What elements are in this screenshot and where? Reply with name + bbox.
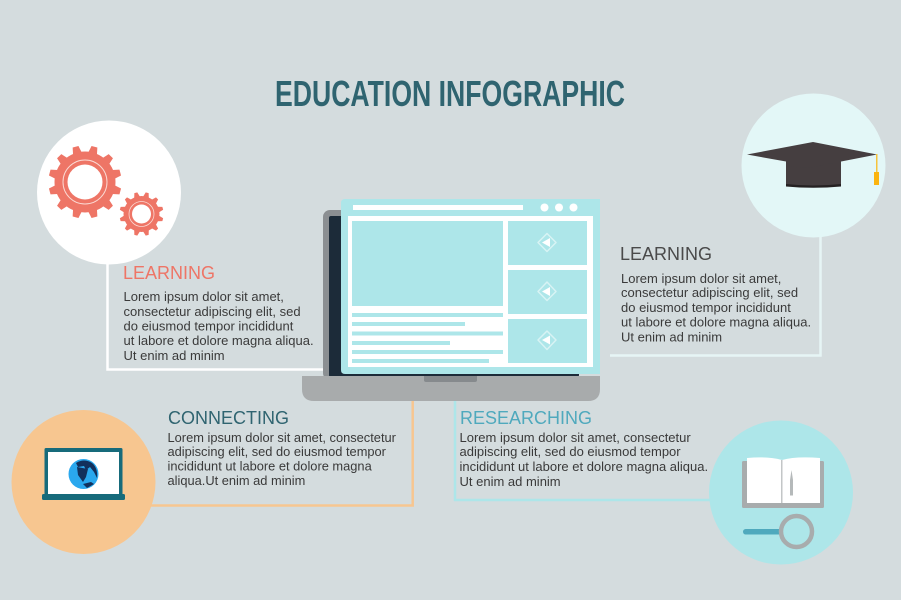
laptop screen [329, 216, 579, 377]
icon: gears in white circle [37, 120, 181, 264]
text block: connecting: adipiscing elit, sed do eiusmod tempor [168, 444, 387, 459]
text block: learning (left): Ut enim ad minim [124, 348, 225, 363]
text block: learning (right): ut labore et dolore magna aliqua. [621, 314, 811, 330]
icon: book and magnifier in teal circle [709, 420, 853, 564]
text block: learning (left): consectetur adipiscing elit, sed [124, 304, 301, 319]
text block: connecting: CONNECTING [168, 408, 289, 428]
text block: connecting [168, 408, 397, 488]
text block: researching [460, 408, 708, 489]
text block: learning (right): LEARNING [620, 244, 712, 264]
icon: graduation cap in pale circle [742, 94, 886, 238]
text block: learning (right) [620, 244, 811, 344]
connector: bottom-left orange line [150, 400, 413, 506]
trackpad notch [424, 376, 477, 382]
text block: researching: Lorem ipsum dolor sit amet, consectetur [460, 430, 691, 445]
text block: learning (left): Lorem ipsum dolor sit amet, [124, 289, 284, 304]
text block: connecting: aliqua.Ut enim ad minim [168, 473, 305, 488]
text block: learning (left): ut labore et dolore magna aliqua. [124, 333, 314, 348]
cap base [786, 160, 841, 188]
magnifier [743, 516, 812, 547]
text block: researching: Ut enim ad minim [460, 474, 561, 489]
text block: researching: adipiscing elit, sed do eiusmod tempor [460, 444, 681, 459]
cap top [747, 142, 877, 168]
text block: learning (left): LEARNING [123, 263, 215, 283]
central laptop illustration [302, 199, 600, 401]
text block: learning (right): consectetur adipiscing elit, sed [621, 285, 798, 300]
laptop lid [323, 210, 383, 380]
text block: researching: RESEARCHING [460, 408, 592, 428]
connector: top-right white line [610, 235, 820, 356]
text block: learning (right): do eiusmod tempor incididunt [621, 300, 791, 315]
connector: top-left white line [108, 250, 325, 370]
icon: laptop with globe in orange circle [12, 410, 156, 554]
text block: researching: incididunt ut labore et dolore magna aliqua. [460, 459, 708, 474]
text block: learning (right): Lorem ipsum dolor sit amet, [621, 271, 781, 286]
laptop base [302, 376, 600, 401]
thumbnail 1 [508, 221, 587, 265]
title: EDUCATION INFOGRAPHIC [275, 73, 625, 114]
text block: connecting: incididunt ut labore et dolore magna [168, 458, 373, 474]
tassel [874, 154, 879, 185]
thumbnail 3 [508, 319, 587, 363]
text lines [352, 313, 503, 363]
text block: learning (left) [123, 263, 314, 363]
small gear [119, 192, 164, 236]
text block: connecting: Lorem ipsum dolor sit amet, consectetur [168, 430, 397, 445]
globe [68, 459, 98, 489]
main image area [352, 221, 503, 306]
text block: learning (right): Ut enim ad minim [621, 330, 722, 344]
browser window [341, 199, 600, 374]
book [742, 457, 824, 508]
large gear [48, 145, 122, 219]
connector: bottom-right teal line [455, 400, 712, 500]
thumbnail 2 [508, 270, 587, 314]
text block: learning (left): do eiusmod tempor incididunt [124, 318, 294, 334]
